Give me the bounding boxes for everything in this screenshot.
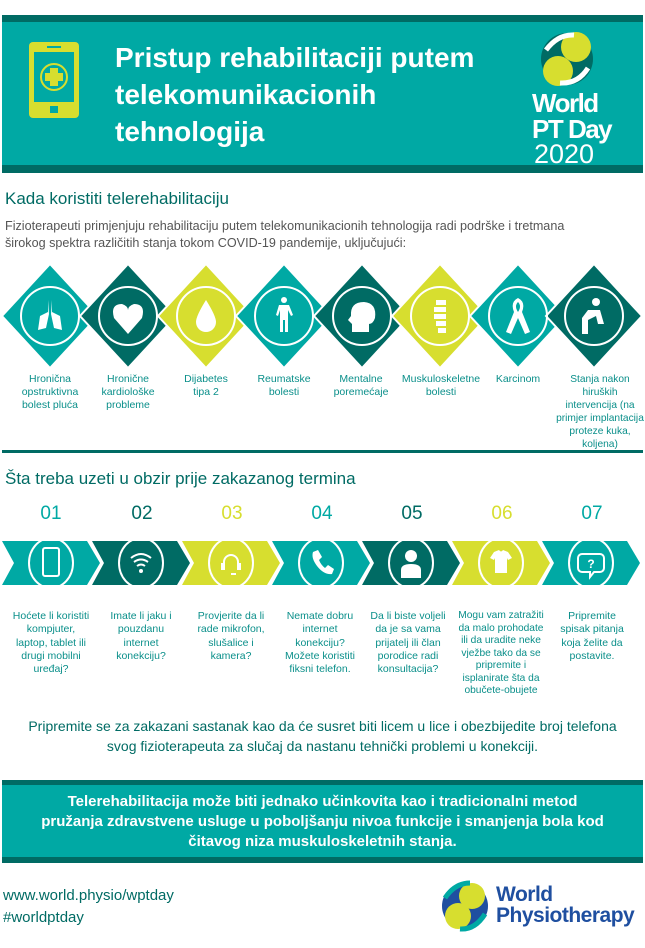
footer links: www.world.physio/wptday: [3, 887, 174, 904]
text: 06: [491, 503, 513, 524]
preparation note: Pripremite se za zakazani sastanak kao da će susret biti licem u lice i obezbijedite broj telefona svog fizioterapeuta za slučaj da nastanu tehnički problemi u konekciji.: [28, 718, 617, 754]
heading: Kada koristiti: Kada koristiti telerehabilitaciju: [5, 189, 229, 208]
text: Provjerite da li rade mikrofon, slušalice i kamera?: [197, 610, 265, 662]
diamond labels: Hronična opstruktivna bolest pluća: [22, 373, 78, 411]
text: Karcinom: [496, 373, 540, 385]
logo: World Physiotherapy: Physiotherapy: [496, 904, 634, 927]
text: Muskuloskeletne bolesti: [402, 373, 480, 398]
callout box: [2, 780, 643, 863]
logo: World PT Day 2020: 2020: [534, 139, 594, 169]
logo: World PT Day 2020: [532, 32, 612, 169]
text: Mentalne poremećaje: [334, 373, 388, 398]
header banner: [2, 15, 643, 173]
callout box: Telerehabilitacija može biti jednako učinkovita kao i tradicionalni metod pružanja zdravstvene usluge u poboljšanju nivoa funkcije i smanjenja bola kod čitavog niza muskuloskeletnih stanja.: [41, 793, 604, 850]
intro paragraph: Fizioterapeuti primjenjuju rehabilitaciju putem telekomunikacionih tehnologija radi podrške i tretmana širokog spektra različitih stanja tokom COVID-19 pandemije, uključujući:: [5, 219, 564, 250]
diamonds row: [3, 266, 641, 366]
text: Dijabetes tipa 2: [184, 373, 228, 398]
title: Pristup rehabilitaciji putem telekomunikacionih tehnologija: [115, 42, 474, 147]
text: Hronične kardiološke probleme: [101, 373, 155, 411]
footer links: #worldptday: [3, 909, 84, 926]
text: Nemate dobru internet konekciju? Možete koristiti fiksni telefon.: [285, 610, 355, 675]
step texts: Hoćete li koristiti kompjuter, laptop, tablet ili drugi mobilni uređaj?: [13, 610, 89, 675]
chevron steps: ?: [587, 557, 595, 571]
text: Da li biste voljeli da je sa vama prijatelj ili član porodice radi konsultacija?: [370, 610, 446, 675]
footer links: [3, 887, 174, 926]
text: 05: [401, 503, 423, 524]
text: Pripremite spisak pitanja koja želite da postavite.: [560, 610, 624, 662]
logo: World PT Day 2020: PT Day: [532, 114, 611, 144]
text: 07: [581, 503, 603, 524]
text: 04: [311, 503, 333, 524]
icon: phone with plus: [29, 42, 79, 118]
text: 03: [221, 503, 243, 524]
logo: World Physiotherapy: [442, 880, 634, 932]
logo: World Physiotherapy: World: [496, 883, 553, 906]
step numbers: 01: [40, 503, 62, 524]
heading: Šta treba: Šta treba uzeti u obzir prije zakazanog termina: [5, 469, 356, 488]
text: Imate li jaku i pouzdanu internet konekciju?: [110, 610, 172, 662]
chevron steps: [2, 541, 640, 585]
text: Mogu vam zatražiti da malo prohodate ili da uradite neke vježbe tako da se pripremite i isplanirate šta da obučete-obujete: [458, 610, 544, 696]
text: Reumatske bolesti: [257, 373, 311, 398]
text: 02: [131, 503, 153, 524]
logo: World PT Day 2020: World: [532, 88, 598, 118]
text: Stanja nakon hiruških intervencija (na primjer implantacija proteze kuka, koljena): [556, 374, 644, 450]
